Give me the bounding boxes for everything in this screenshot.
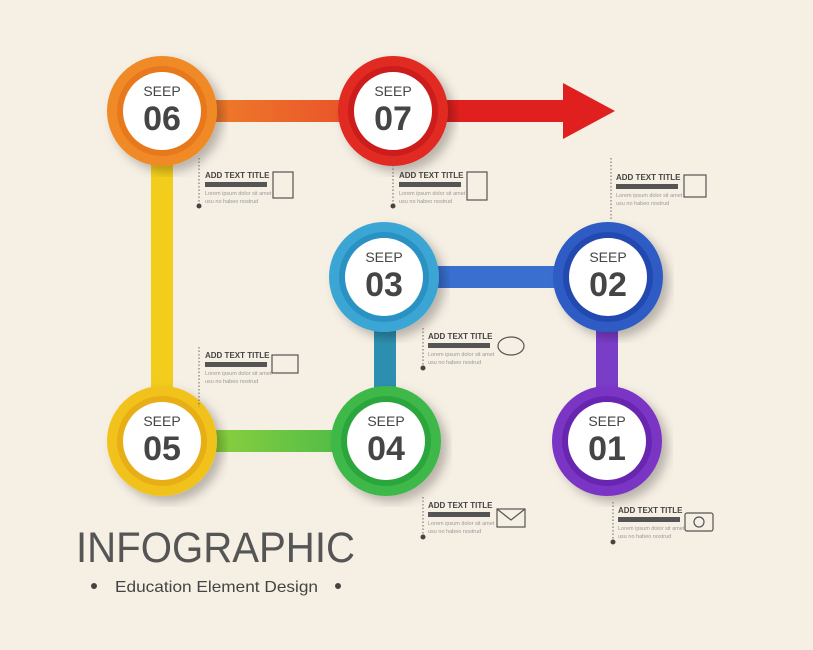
text blocks <box>196 158 713 544</box>
connectors <box>151 83 618 452</box>
text block 03: usu no habeo nostrud <box>428 360 481 366</box>
text block 07: ADD TEXT TITLE <box>399 171 464 180</box>
text block 04: ADD TEXT TITLE <box>428 501 493 510</box>
circle 07: 07 <box>374 100 412 138</box>
title: INFOGRAPHIC <box>76 524 355 572</box>
text block 03: Lorem ipsum dolor sit amet <box>428 352 495 358</box>
text block 05: ADD TEXT TITLE <box>205 351 270 360</box>
circle 01 <box>552 386 662 496</box>
text block 06: Lorem ipsum dolor sit amet <box>205 191 272 197</box>
circle 05: SEEP <box>143 413 181 429</box>
text block 04: usu no habeo nostrud <box>428 529 481 535</box>
text block 02 <box>611 158 706 220</box>
circle 01: SEEP <box>588 413 626 429</box>
text block 04: Lorem ipsum dolor sit amet <box>428 521 495 527</box>
circle 07 <box>338 56 448 166</box>
step circles <box>107 56 663 496</box>
subtitle: Education Element Design <box>115 579 318 596</box>
text block 01: ADD TEXT TITLE <box>618 506 683 515</box>
text block 07 <box>390 158 487 208</box>
circle 02: SEEP <box>589 249 627 265</box>
text block 07: Lorem ipsum dolor sit amet <box>399 191 466 197</box>
circle 04: SEEP <box>367 413 405 429</box>
text block 07: usu no habeo nostrud <box>399 199 452 205</box>
circle 03: SEEP <box>365 249 403 265</box>
circle 03: 03 <box>365 266 403 304</box>
text block 02: Lorem ipsum dolor sit amet <box>616 193 683 199</box>
text block 04 <box>420 497 525 540</box>
text block 06: usu no habeo nostrud <box>205 199 258 205</box>
circle 04: 04 <box>367 430 405 468</box>
circle 05: 05 <box>143 430 181 468</box>
circle 05 <box>107 386 217 496</box>
text block 02: ADD TEXT TITLE <box>616 173 681 182</box>
text block 06: ADD TEXT TITLE <box>205 171 270 180</box>
text block 06 <box>196 158 293 208</box>
text block 03: ADD TEXT TITLE <box>428 332 493 341</box>
text block 05: Lorem ipsum dolor sit amet <box>205 371 272 377</box>
text block 02: usu no habeo nostrud <box>616 201 669 207</box>
text block 01: Lorem ipsum dolor sit amet <box>618 526 685 532</box>
circle 06: SEEP <box>143 83 181 99</box>
circle 06 <box>107 56 217 166</box>
text block 01: usu no habeo nostrud <box>618 534 671 540</box>
circle 04 <box>331 386 441 496</box>
circle 06: 06 <box>143 100 181 138</box>
circle 03 <box>329 222 439 332</box>
circle 02 <box>553 222 663 332</box>
circle 02: 02 <box>589 266 627 304</box>
text block 01 <box>610 502 713 544</box>
circle 07: SEEP <box>374 83 412 99</box>
text block 03 <box>420 328 524 370</box>
circle 01: 01 <box>588 430 626 468</box>
text block 05: usu no habeo nostrud <box>205 379 258 385</box>
text block 05 <box>199 347 298 407</box>
